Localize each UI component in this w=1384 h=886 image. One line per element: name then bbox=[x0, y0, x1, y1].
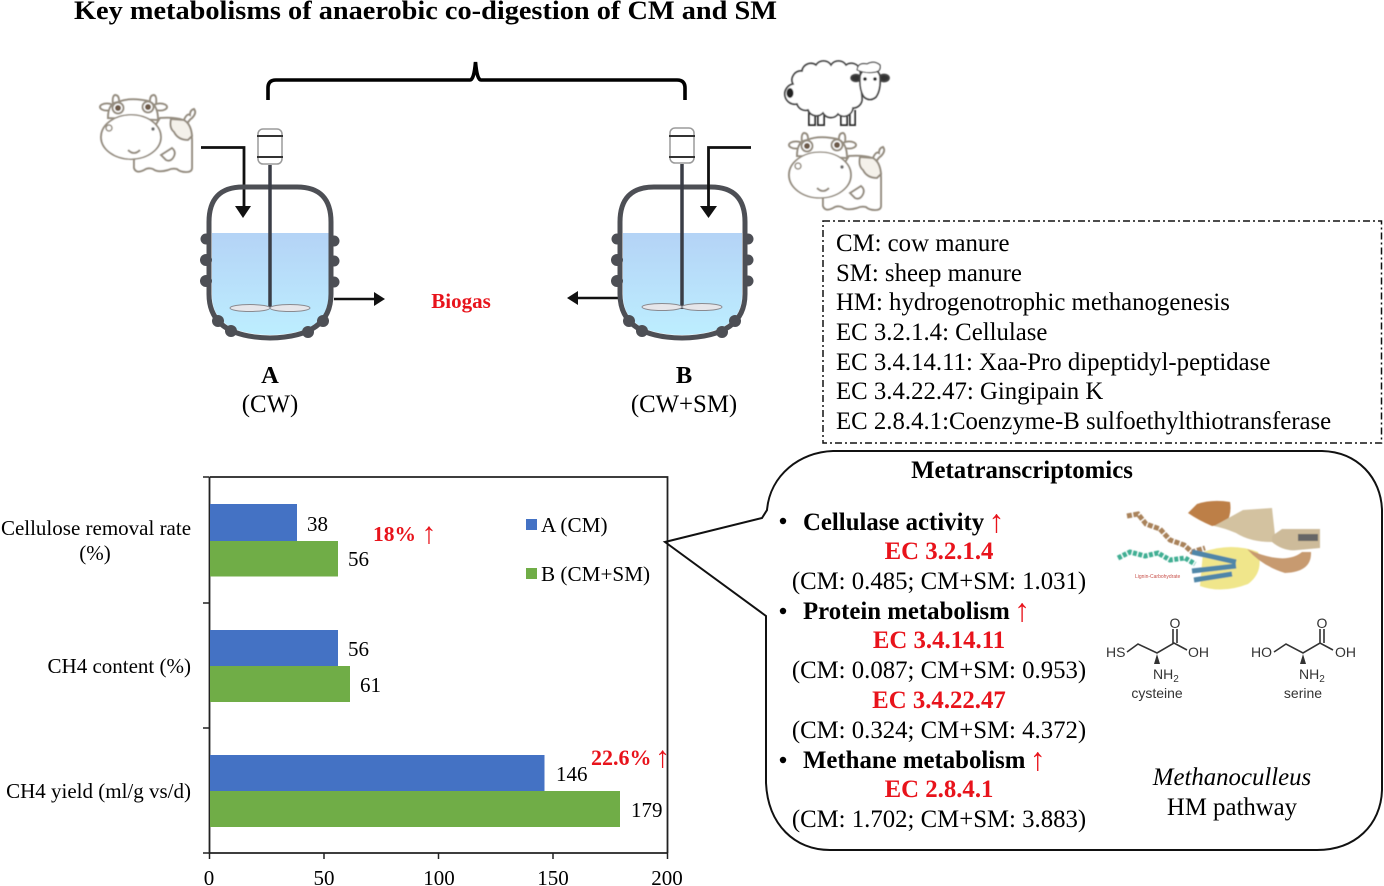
list: methane metabolism bbox=[780, 741, 1086, 833]
illustration: serine molecule: O bbox=[1317, 615, 1328, 631]
illustration: serine molecule: NH bbox=[1299, 666, 1319, 682]
chart plot frame bbox=[210, 477, 668, 853]
illustration: lignocellulose structure bbox=[1118, 501, 1320, 590]
legend box: abbreviations: EC 3.4.14.11: Xaa-Pro dipeptidyl-peptidase bbox=[836, 349, 1270, 376]
bar value labels: 56 bbox=[348, 637, 369, 661]
list: protein metabolism: Protein metabolism bbox=[803, 598, 1010, 625]
legend box: abbreviations: SM: sheep manure bbox=[836, 260, 1022, 287]
illustration: lignocellulose structure: Lignin-Carbohydrate bbox=[1135, 574, 1181, 580]
list: methane metabolism: EC 2.8.4.1 bbox=[885, 776, 993, 803]
legend box: abbreviations: EC 2.8.4.1:Coenzyme-B sulfoethylthiotransferase bbox=[836, 408, 1331, 435]
chart legend: A (CM) bbox=[541, 513, 608, 537]
legend box: abbreviations: HM: hydrogenotrophic methanogenesis bbox=[836, 289, 1230, 316]
icon: sheep bbox=[785, 61, 889, 125]
y axis labels bbox=[1, 516, 191, 803]
chart legend bbox=[526, 513, 650, 586]
label: Methanoculleus HM pathway: Methanoculleus bbox=[1152, 764, 1311, 791]
illustration: cysteine molecule: OH bbox=[1188, 644, 1209, 660]
label: reactor B: B bbox=[676, 362, 692, 389]
list: cellulase activity bbox=[780, 503, 1086, 595]
speech bubble bbox=[665, 451, 1382, 850]
panel: metatranscriptomics bbox=[665, 451, 1382, 850]
legend box: abbreviations: EC 3.2.1.4: Cellulase bbox=[836, 319, 1047, 346]
bars: series A bbox=[210, 504, 544, 791]
list: protein metabolism bbox=[780, 592, 1086, 744]
y axis labels: CH4 content (%) bbox=[48, 654, 191, 678]
illustration: cysteine molecule: NH bbox=[1153, 666, 1173, 682]
illustration: serine molecule: OH bbox=[1335, 644, 1356, 660]
bar value labels bbox=[307, 512, 662, 822]
illustration: serine molecule bbox=[1251, 615, 1356, 701]
list: cellulase activity: EC 3.2.1.4 bbox=[885, 538, 993, 565]
label: reactor A: A bbox=[261, 362, 279, 389]
icon: cow B bbox=[789, 133, 884, 210]
bar value labels: 56 bbox=[348, 547, 369, 571]
label: reactor A bbox=[242, 362, 298, 418]
illustration: serine molecule: serine bbox=[1284, 685, 1322, 701]
label: reactor B bbox=[631, 362, 737, 418]
list: protein metabolism: (CM: 0.087; CM+SM: 0.953) bbox=[792, 657, 1086, 684]
list: methane metabolism: (CM: 1.702; CM+SM: 3.883) bbox=[792, 806, 1086, 833]
bar value labels: 179 bbox=[631, 798, 662, 822]
list: methane metabolism: ↑ bbox=[1030, 741, 1046, 777]
bar value labels: 38 bbox=[307, 512, 328, 536]
callout: 22.6% increase: 22.6% bbox=[591, 745, 652, 770]
illustration: cysteine molecule: cysteine bbox=[1131, 685, 1183, 701]
arrow: biogas from tank A bbox=[334, 292, 385, 306]
list: protein metabolism: ↑ bbox=[1014, 592, 1030, 628]
arrow: biogas from tank B bbox=[567, 291, 618, 305]
chart ticks bbox=[203, 477, 668, 859]
bar chart bbox=[1, 477, 683, 886]
label: Methanoculleus HM pathway bbox=[1152, 764, 1311, 821]
legend box: abbreviations: EC 3.4.22.47: Gingipain K bbox=[836, 378, 1103, 405]
list: methane metabolism: Methane metabolism bbox=[803, 747, 1025, 774]
legend box: abbreviations bbox=[823, 221, 1382, 443]
list: protein metabolism: EC 3.4.14.11 bbox=[873, 627, 1005, 654]
icon: cow A bbox=[100, 95, 195, 172]
bracket bbox=[268, 62, 685, 100]
bar value labels: 146 bbox=[556, 762, 588, 786]
y axis labels: CH4 yield (ml/g vs/d) bbox=[6, 779, 191, 803]
list: cellulase activity: ↑ bbox=[988, 503, 1004, 539]
y axis labels: Cellulose removal rate bbox=[1, 516, 191, 540]
bars: series B bbox=[210, 541, 620, 827]
list: protein metabolism: EC 3.4.22.47 bbox=[872, 687, 1006, 714]
illustration: serine molecule: HO bbox=[1251, 644, 1272, 660]
illustration: serine molecule: 2 bbox=[1319, 674, 1325, 685]
list: cellulase activity: (CM: 0.485; CM+SM: 1.031) bbox=[792, 568, 1086, 595]
illustration: cysteine molecule: 2 bbox=[1173, 674, 1179, 685]
callout: 18% increase: 18% bbox=[373, 522, 416, 546]
panel heading: Metatranscriptomics bbox=[911, 457, 1133, 484]
callout: 18% increase: ↑ bbox=[421, 517, 436, 550]
illustration: cysteine molecule bbox=[1106, 615, 1209, 701]
callout: 22.6% increase: ↑ bbox=[655, 741, 670, 774]
icon: reactor tank A bbox=[200, 129, 340, 338]
label: reactor A: (CW) bbox=[242, 391, 298, 418]
arrow: feed into tank B bbox=[700, 148, 751, 218]
legend box: abbreviations: CM: cow manure bbox=[836, 230, 1010, 257]
label: Methanoculleus HM pathway: HM pathway bbox=[1167, 794, 1298, 821]
label: reactor B: (CW+SM) bbox=[631, 391, 737, 418]
label: biogas: Biogas bbox=[431, 289, 491, 313]
illustration: cysteine molecule: O bbox=[1170, 615, 1181, 631]
list: cellulase activity: Cellulase activity bbox=[803, 509, 984, 536]
y axis labels: (%) bbox=[79, 541, 111, 565]
chart legend: B (CM+SM) bbox=[541, 562, 650, 586]
list: protein metabolism: (CM: 0.324; CM+SM: 4.372) bbox=[792, 717, 1086, 744]
illustration: cysteine molecule: HS bbox=[1106, 644, 1125, 660]
icon: reactor tank B bbox=[611, 128, 754, 338]
bar value labels: 61 bbox=[360, 673, 381, 697]
x axis labels bbox=[204, 866, 683, 886]
arrow: feed into tank A bbox=[201, 148, 251, 218]
